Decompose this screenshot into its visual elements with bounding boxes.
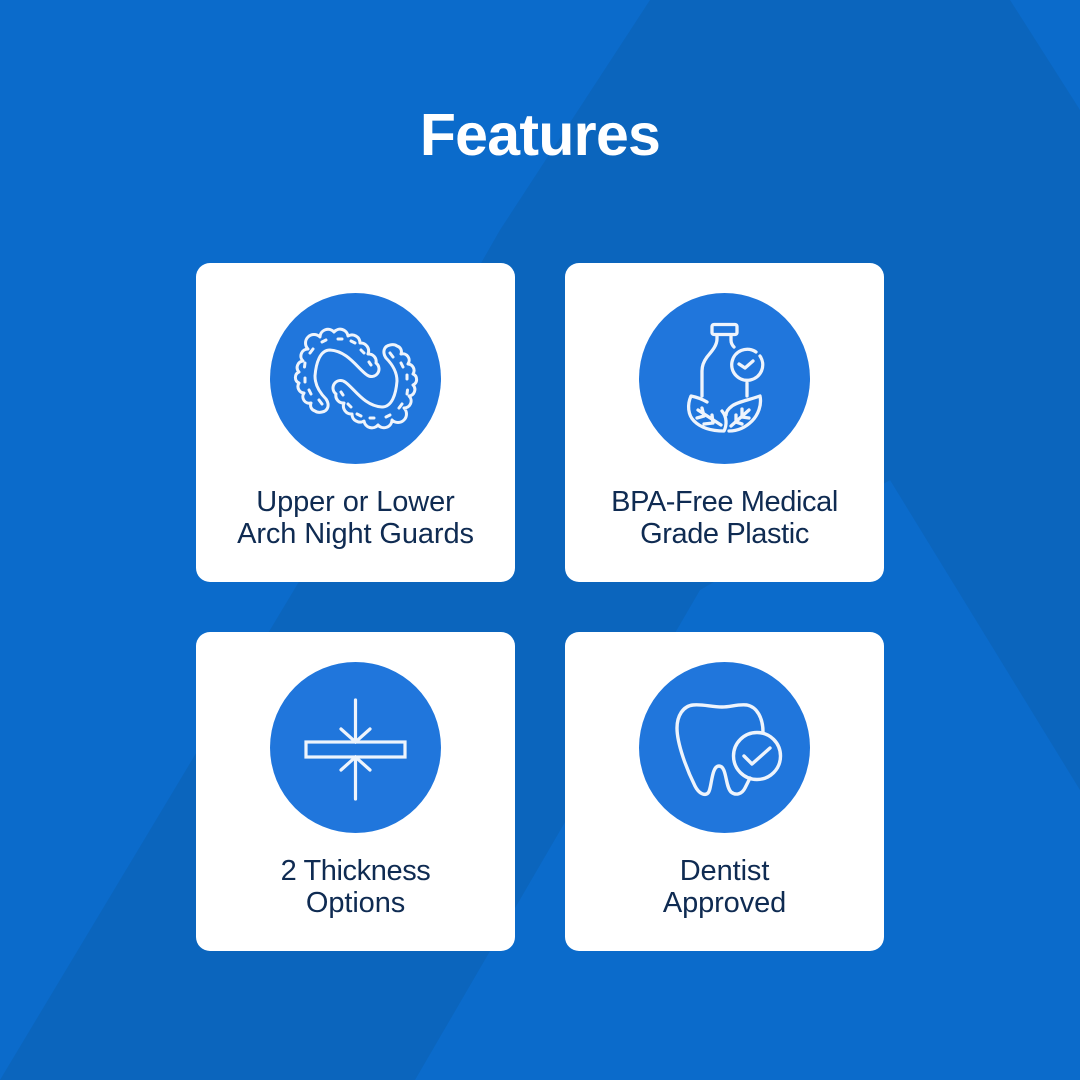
icon: tooth with check — [639, 662, 810, 833]
label: Approved — [663, 886, 786, 918]
label — [237, 486, 474, 550]
panel: thickness options — [196, 632, 515, 951]
label: Options — [306, 886, 405, 918]
icon: bottle with leaves — [639, 293, 810, 464]
icon: night guard — [270, 293, 441, 464]
panel: BPA-free plastic — [565, 263, 884, 582]
label: Upper or Lower — [256, 486, 455, 518]
label: Arch Night Guards — [237, 518, 474, 550]
label: BPA-Free Medical — [611, 486, 838, 518]
label — [281, 854, 430, 918]
label: 2 Thickness — [281, 854, 430, 886]
label — [611, 486, 838, 550]
panel: dentist approved — [565, 632, 884, 951]
label: Dentist — [680, 854, 769, 886]
label — [663, 854, 786, 918]
panel: upper or lower arch — [196, 263, 515, 582]
title: Features — [420, 102, 660, 168]
icon: thickness arrows — [270, 662, 441, 833]
label: Grade Plastic — [640, 518, 809, 550]
